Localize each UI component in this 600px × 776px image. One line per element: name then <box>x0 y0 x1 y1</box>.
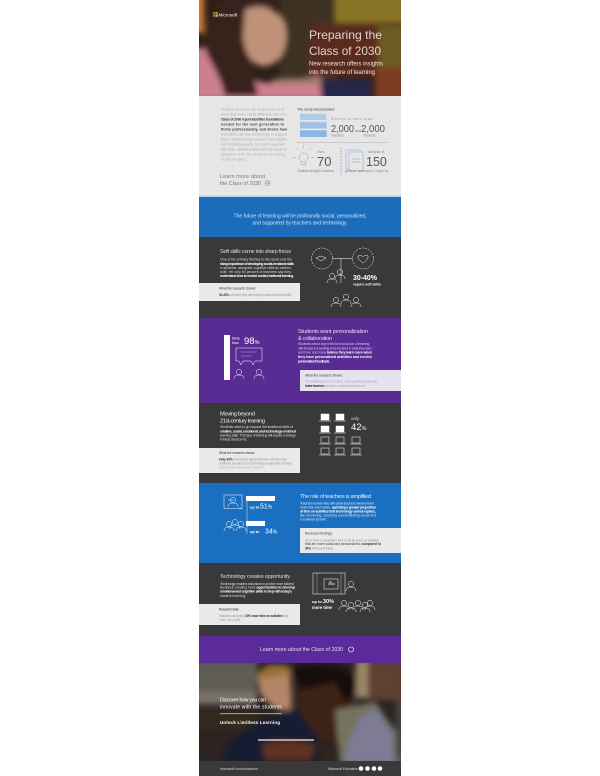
stat: surveyed people: 2,000 <box>331 123 354 135</box>
panel: technology creates opportunity <box>199 563 401 636</box>
hero subtitle <box>309 62 383 76</box>
paragraph: with 80 percent wanting to be involved in what they learn <box>298 346 372 350</box>
intro paragraph: them. Synthesizing research and insights <box>221 138 287 142</box>
callout box <box>300 528 401 553</box>
icon: grid of laptops <box>319 414 362 455</box>
stat: only 42%: 42% <box>351 422 367 433</box>
heading: Technology creates opportunity <box>220 574 290 580</box>
learn more link <box>220 174 270 187</box>
stat: more than 98%: 98% <box>244 336 260 347</box>
stat: reports: Analysis of <box>368 150 384 154</box>
callout box: Research findings: <box>305 532 333 536</box>
learn more link: the Class of 2030 <box>220 181 261 187</box>
icon: connected skills diagram <box>312 248 374 307</box>
closing text: Discover how you can <box>220 698 266 704</box>
heading: Soft skills come into sharp focus <box>220 249 291 255</box>
panel: personalization <box>199 318 401 403</box>
stat: 30% more time <box>312 599 334 610</box>
stat: 34% <box>250 528 278 536</box>
hero title: Preparing the <box>309 28 382 42</box>
intro paragraph: Today's students will enter a world of <box>221 108 284 112</box>
callout box: across the whole curriculum. <box>219 466 264 470</box>
footer: microsoft.com/education <box>220 767 258 771</box>
panel: beyond 21st-century learning <box>199 403 401 483</box>
bar: 34% <box>246 521 265 526</box>
intro paragraph: the skills, attitudes and learning needs of <box>221 148 287 152</box>
paragraph <box>220 425 296 442</box>
icon: screen and teacher <box>313 573 356 594</box>
microsoft logo: Microsoft <box>218 13 238 18</box>
stat: more than 98%: More <box>232 336 240 340</box>
intro paragraph <box>221 108 287 162</box>
callout box <box>300 370 401 391</box>
social icons <box>359 766 382 771</box>
intro paragraph: students with the help of emerging <box>221 152 285 156</box>
stat: surveyed people: The study incorporated: <box>297 108 335 112</box>
paragraph: emotional growth. <box>300 518 327 522</box>
stat: 30-40%: require soft skills <box>353 282 381 286</box>
intro paragraph: educators can use technology to support <box>221 132 287 136</box>
banner: learn more <box>199 636 401 663</box>
footer <box>199 761 401 776</box>
stat: only 42% <box>351 416 367 433</box>
stat: 34%: 34% <box>265 528 278 536</box>
bar: 51% <box>246 496 275 501</box>
closing text: innovate with the students <box>220 704 282 710</box>
hero subtitle: into the future of learning <box>309 70 375 76</box>
callout box: foster deep skills. <box>219 618 241 622</box>
icon: speech bubble and students <box>234 348 264 379</box>
stat: surveyed people: and <box>355 129 361 133</box>
paragraph: they have personalized activities and receive <box>298 355 372 359</box>
stat: surveyed people: Students <box>363 134 376 138</box>
hero panel <box>195 0 406 100</box>
heading: & collaboration <box>298 336 332 342</box>
paragraph: rising importance of developing social-emotional skills <box>220 262 294 266</box>
panel: intro <box>199 96 401 197</box>
closing photo <box>199 663 401 761</box>
callout box: Personalization is a key driver of the positive impact that <box>305 380 377 384</box>
closing text <box>220 698 282 725</box>
microsoft logo <box>213 12 238 18</box>
stat: reports: 150 <box>366 155 387 169</box>
icon: documents <box>346 150 363 171</box>
paragraph: more than ever before, spending a greater proportion <box>300 506 376 510</box>
heading: Moving beyond <box>220 412 255 418</box>
paragraph: student learning. <box>220 594 246 598</box>
heading <box>220 412 265 424</box>
paragraph: in students, alongside cognitive skills as careers <box>220 266 291 270</box>
closing text: Unlock Limitless Learning <box>220 720 280 725</box>
paragraph: learning skills. This type of learning will require a change <box>220 434 296 438</box>
paragraph: emotional and cognitive skills in step with today's <box>220 590 292 594</box>
banner: learn more: Learn more about the Class of 2030 <box>260 647 343 653</box>
callout box: Only 42% of teachers agree that their schools have <box>219 458 287 462</box>
intro paragraph: Class of 2030 report identifies foundations <box>221 118 284 122</box>
paragraph: in these classrooms. <box>220 438 247 442</box>
stat: surveyed people: Teachers <box>331 134 344 138</box>
stat: more than 98% <box>232 336 260 347</box>
heading: 21st-century learning <box>220 418 265 424</box>
icon: light bulb <box>293 145 314 165</box>
callout box: Up to 51% of a teacher's time could be spent on activities <box>305 538 379 542</box>
callout box <box>199 448 300 473</box>
stat: reports <box>345 150 388 173</box>
callout box: Teachers can spend 30% more time on activities that <box>219 614 288 618</box>
stat: only 42%: only <box>351 416 360 421</box>
stat: surveyed people: Surveys of more than <box>331 117 372 121</box>
heading: Students want personalization <box>298 329 368 335</box>
callout box: 30-40% of future jobs will require social-emotional skills <box>219 293 291 297</box>
callout box: sufficient resources for technology-supported learning <box>219 462 292 466</box>
stat: thought leaders: Over <box>317 150 325 154</box>
bar: 98% <box>224 335 230 380</box>
intro paragraph: needed for the next generation to <box>221 122 284 126</box>
stat: 51%: up to <box>250 506 260 510</box>
paragraph: feedback, creating more opportunities to develop <box>220 586 295 590</box>
heading <box>298 329 368 342</box>
stat: 51%: 51% <box>260 504 273 510</box>
callout box: What the research shows: <box>219 286 256 290</box>
learn more link: Learn more about <box>220 174 266 180</box>
paragraph: like mentoring, coaching and facilitating social and <box>300 514 376 518</box>
paragraph: Technology enables educators to provide more tailored <box>220 582 294 586</box>
heading: The role of teachers is amplified <box>300 494 371 500</box>
paragraph <box>300 502 376 522</box>
callout box <box>199 283 300 301</box>
paragraph: and how, and many believe they learn more when <box>298 351 372 355</box>
icon: students row <box>339 600 375 612</box>
banner: future of learning: and supported by teachers and technology. <box>252 220 348 226</box>
callout box: Research data: <box>219 608 239 612</box>
stat: surveyed people: 2,000 <box>361 123 385 135</box>
banner: future of learning: The future of learning will be profoundly social, personalized, <box>234 214 366 220</box>
callout box <box>199 604 300 625</box>
stat: 30% more time: up to 30% <box>312 599 334 605</box>
icon: crowd of people <box>300 113 327 137</box>
paragraph: One of the primary themes in the report was the <box>220 258 292 262</box>
stat: 30% more time: more time <box>312 605 333 610</box>
callout box: What the research shows: <box>305 374 343 378</box>
callout box: What the research shows: <box>219 451 255 455</box>
paragraph: Students want a say in the form and pace of learning, <box>298 342 370 346</box>
paragraph: shift. Yet only 54 percent of teachers say they <box>220 270 291 274</box>
icon: group of students <box>224 519 246 531</box>
footer: Microsoft Education <box>328 767 358 771</box>
callout box: that are more social and personalized, compared to <box>305 542 381 546</box>
stat: more than 98%: than <box>232 341 239 345</box>
hero subtitle: New research offers insights <box>309 62 383 68</box>
banner: future of learning <box>199 197 401 237</box>
stat: 30-40%: 30-40% <box>353 275 378 282</box>
hero photo <box>195 0 406 100</box>
panel: teachers' role <box>199 483 401 563</box>
paragraph <box>220 258 294 278</box>
callout box: better teachers can have on student achievement <box>305 384 365 388</box>
hero title line 2: Class of 2030 <box>309 44 381 58</box>
stat: thought leaders <box>293 145 334 173</box>
intro paragraph: work that looks vastly different. Our new <box>221 112 287 116</box>
paragraph <box>220 582 295 598</box>
paragraph <box>298 342 372 364</box>
stat: 34%: up to <box>250 530 260 534</box>
paragraph: Teachers remain vital, with great teachers needed even <box>300 502 374 506</box>
callout box: 34% at the current level <box>305 546 333 550</box>
stat: thought leaders: Global thought leaders <box>298 169 334 173</box>
stat: 51% <box>250 504 273 510</box>
paragraph: of time on activities that technology cannot replace, <box>300 510 376 514</box>
icon: teacher and screen <box>224 495 242 508</box>
stat: thought leaders: 70 <box>317 154 331 169</box>
intro paragraph: technologies. <box>221 158 247 162</box>
intro paragraph: from leading experts, the report explores <box>221 142 285 146</box>
stat: 30-40% <box>353 275 381 286</box>
stat: surveyed people <box>297 108 385 138</box>
intro paragraph: thrive professionally, and shows how <box>221 128 287 132</box>
paragraph: Students need to go beyond the traditional skills of <box>220 425 293 429</box>
paragraph: personalized feedback. <box>298 360 330 364</box>
paragraph: understand how to embed social-emotional learning. <box>220 274 294 278</box>
paragraph: creative, social, emotional, and technology-enriched <box>220 430 296 434</box>
stat: reports: global research reports <box>345 169 388 173</box>
panel: soft skills <box>199 237 401 318</box>
